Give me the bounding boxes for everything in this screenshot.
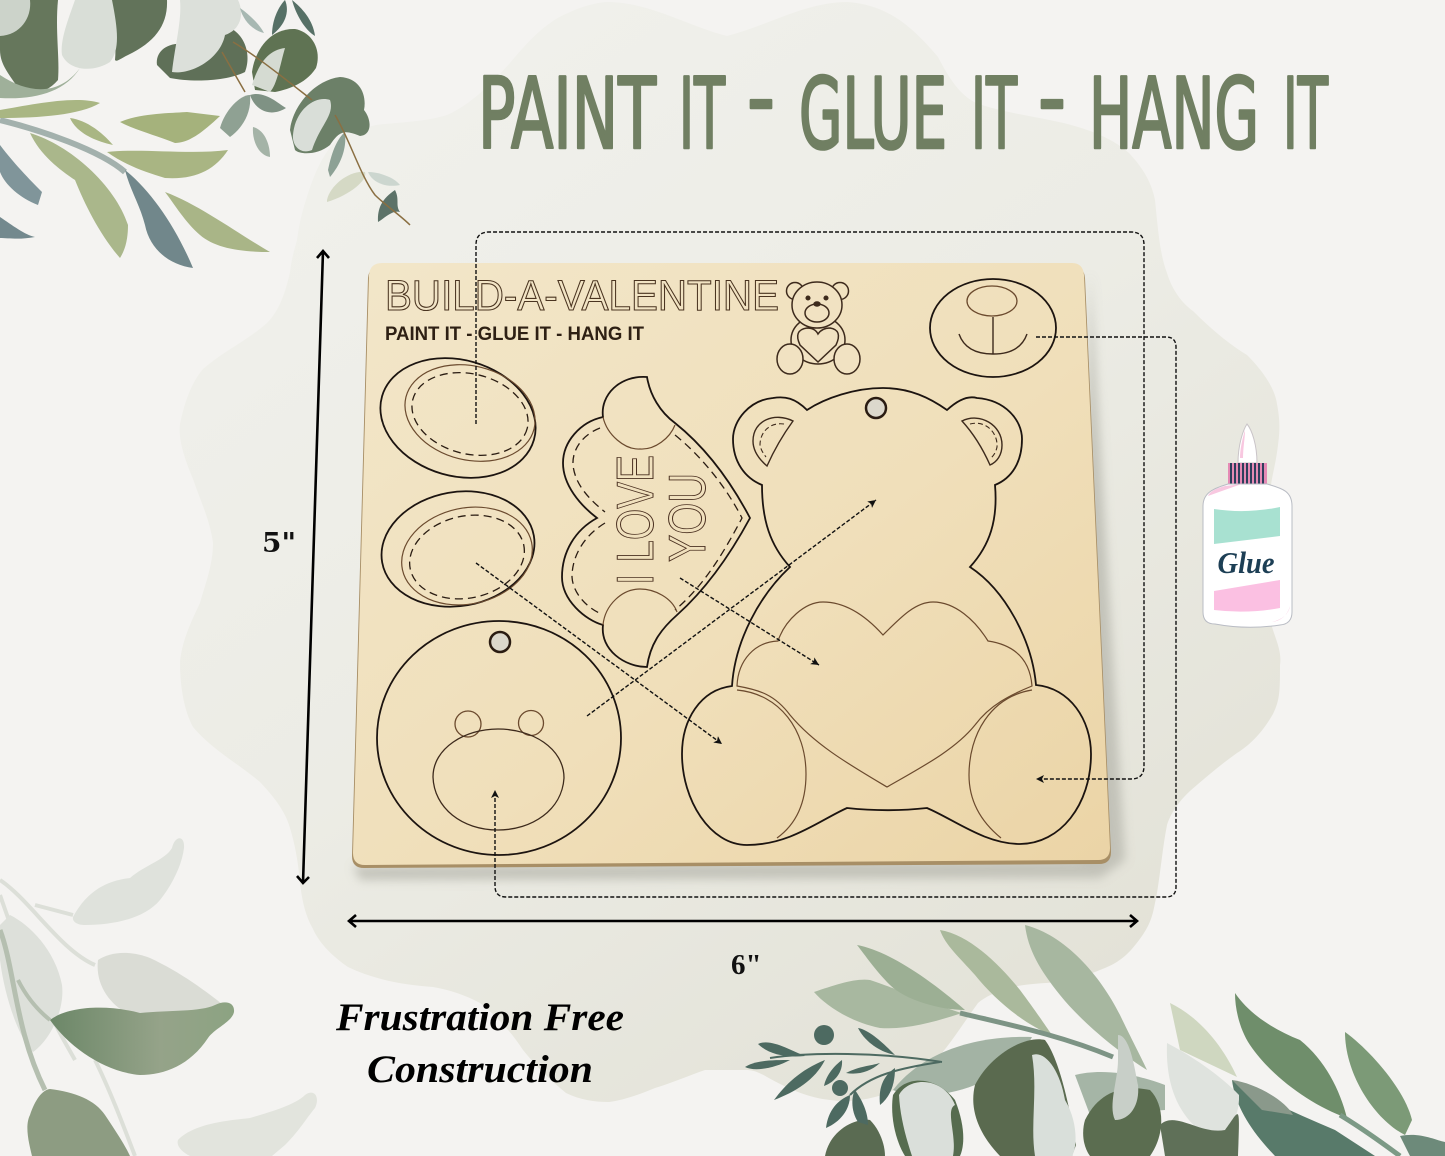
title: GLUE — [799, 58, 947, 172]
icon: glue bottle — [1203, 424, 1292, 627]
dimension arrow: height — [262, 251, 329, 883]
background blob — [180, 2, 1280, 1102]
title: IT — [679, 58, 726, 172]
foliage: bottom right — [745, 925, 1445, 1156]
title: - — [747, 41, 775, 155]
title: IT — [1283, 58, 1329, 172]
cut-out: heart with arms — [562, 377, 750, 667]
cut-out: bear body — [682, 388, 1091, 845]
small bear icon — [777, 282, 860, 374]
heart text: I LOVE — [607, 455, 665, 585]
title: HANG — [1089, 58, 1259, 172]
dimension arrow: width — [349, 915, 1137, 981]
icon: glue bottle: Glue — [1218, 545, 1275, 580]
cut-out: lower oval foot — [372, 479, 544, 619]
cut-out: heart with arms: YOU — [659, 473, 717, 562]
cut-out: bear snout circle — [930, 279, 1056, 377]
width label: 6" — [731, 949, 762, 981]
title — [478, 41, 1329, 172]
caption — [335, 996, 624, 1091]
dotted connector arrows — [476, 232, 1176, 897]
board subheading: PAINT IT - GLUE IT - HANG IT — [385, 324, 644, 345]
board heading: BUILD-A-VALENTINE — [385, 272, 779, 320]
height label: 5" — [262, 528, 296, 559]
title: IT — [971, 58, 1018, 172]
title: - — [1038, 41, 1066, 155]
title: PAINT — [478, 58, 657, 172]
sprig — [745, 1025, 895, 1128]
wooden board — [352, 263, 1125, 880]
foliage: top left — [0, 0, 410, 268]
caption: Construction — [367, 1048, 593, 1091]
foliage: bottom left — [0, 838, 317, 1156]
cut-out: bear head circle — [377, 621, 621, 855]
cut-out: upper oval foot — [366, 340, 550, 496]
caption: Frustration Free — [335, 996, 624, 1039]
